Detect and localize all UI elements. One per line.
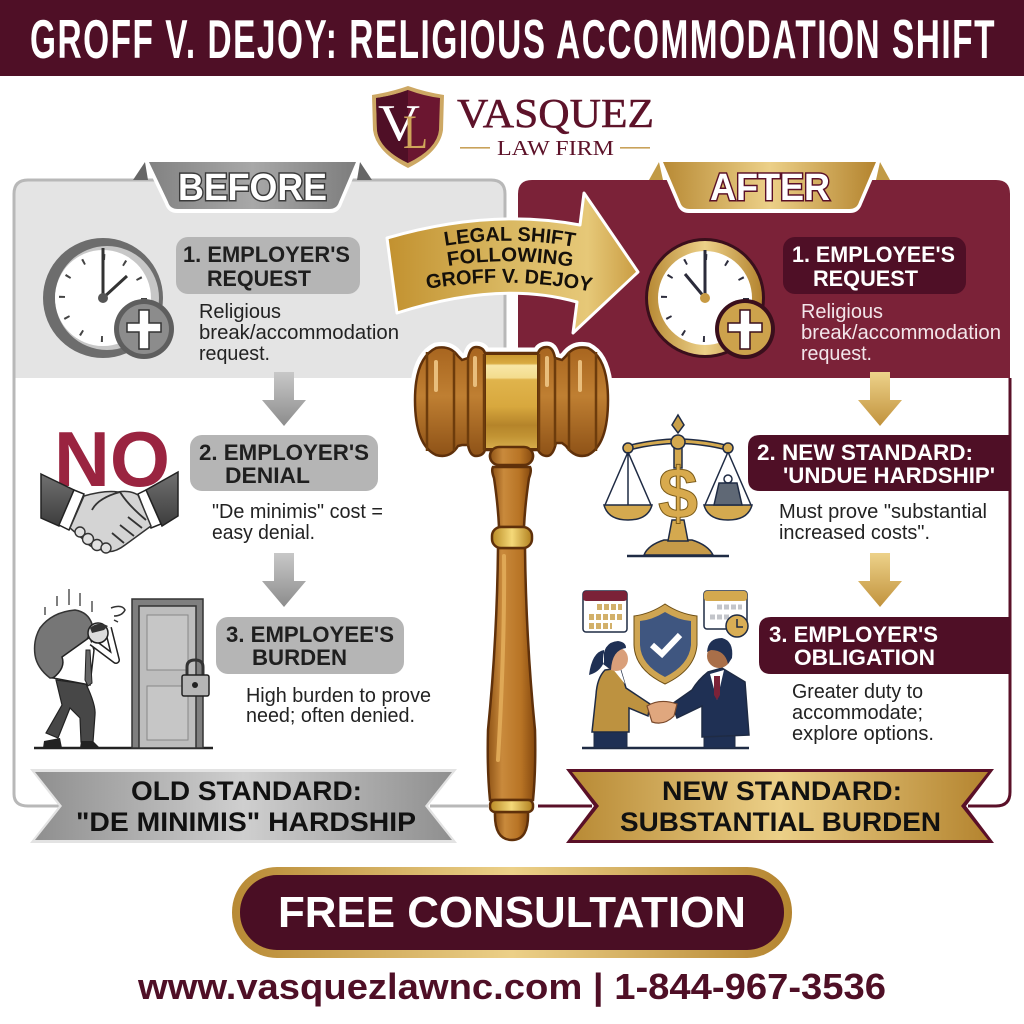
calendar right with clock — [704, 591, 748, 637]
step text: obligation — [792, 680, 934, 745]
step label: new standard undue hardship: 2. NEW STANDARD: — [757, 440, 973, 465]
law firm logo: VASQUEZ — [457, 90, 654, 136]
arrow: step 2 to 3 — [262, 553, 306, 607]
step text: obligation: explore options. — [792, 722, 934, 745]
step text: denial: "De minimis" cost = — [212, 500, 383, 523]
icon: shield monogram — [372, 86, 444, 168]
icon: scales with dollar: $ — [658, 454, 698, 534]
step label: employer's request — [176, 237, 360, 294]
step text: obligation: accommodate; — [792, 701, 923, 724]
button: free consultation — [232, 867, 792, 958]
panel top tint — [14, 180, 505, 378]
step text: request — [801, 300, 1001, 365]
man — [672, 638, 749, 748]
icon: scales with dollar — [604, 415, 752, 556]
clasped hands — [647, 701, 677, 723]
step text: request: request. — [801, 342, 872, 365]
icon: handshake — [41, 472, 178, 553]
icon: clock with cross — [43, 238, 174, 359]
step text: undue hardship — [779, 500, 987, 544]
padlock — [182, 660, 209, 696]
arrow: legal shift — [386, 192, 640, 335]
contact line: www.vasquezlawnc.com | 1-844-967-3536 — [137, 966, 886, 1008]
step label: employee's request: REQUEST — [813, 266, 919, 291]
step label: employer's obligation — [759, 617, 1010, 674]
tab: after: AFTER — [710, 167, 830, 209]
collar over head — [490, 447, 533, 465]
sack and motion lines — [35, 589, 125, 678]
gavel outline halo — [415, 347, 608, 456]
law firm logo — [372, 86, 654, 168]
step label: new standard undue hardship: 'UNDUE HARDSHIP' — [783, 463, 995, 488]
ribbon: old standard — [30, 769, 457, 843]
tab: before — [133, 162, 372, 213]
ribbon: old standard: OLD STANDARD: — [131, 776, 362, 806]
law firm logo: LAW FIRM — [497, 136, 614, 160]
tab: after — [649, 162, 890, 213]
woman — [589, 641, 650, 748]
step text: request — [199, 300, 399, 365]
arrow: step 1 to 2 — [858, 372, 902, 426]
panel outline — [14, 180, 505, 806]
step text: request: request. — [199, 342, 270, 365]
step label: employer's denial — [190, 435, 378, 491]
shield with check — [634, 604, 697, 684]
panel: after — [518, 162, 1010, 843]
tab: before: BEFORE — [178, 167, 327, 209]
panel top fill — [518, 180, 1010, 378]
step text: undue hardship: Must prove "substantial — [779, 500, 987, 523]
gavel head — [415, 347, 608, 456]
step label: employee's burden — [216, 617, 404, 674]
step text: burden: High burden to prove — [246, 684, 431, 707]
icon: clock with cross — [645, 238, 775, 359]
arrow: legal shift: FOLLOWING — [447, 247, 572, 266]
step label: employee's burden: 3. EMPLOYEE'S — [226, 622, 394, 647]
step label: new standard undue hardship — [748, 435, 1010, 491]
text: NO: NO — [54, 415, 170, 503]
step text: denial: easy denial. — [212, 521, 315, 544]
step text: burden: need; often denied. — [246, 704, 415, 727]
gavel handle — [488, 447, 535, 840]
step text: request: Religious — [199, 300, 281, 323]
man — [43, 623, 116, 748]
button: free consultation: FREE CONSULTATION — [278, 888, 746, 937]
step text: undue hardship: increased costs". — [779, 521, 930, 544]
arrow: step 1 to 2 — [262, 372, 306, 426]
step label: employer's denial: 2. EMPLOYER'S — [199, 440, 369, 465]
step text: denial — [212, 500, 383, 544]
arrow: step 2 to 3 — [858, 553, 902, 607]
icon: shield monogram: L — [403, 106, 428, 159]
step label: employer's obligation: OBLIGATION — [794, 645, 935, 670]
ribbon: new standard — [566, 769, 994, 843]
panel: before — [14, 162, 505, 843]
icon: man with burden at locked door — [34, 589, 213, 748]
step label: employer's request: REQUEST — [207, 266, 312, 291]
step text: request: Religious — [801, 300, 883, 323]
step label: employer's denial: DENIAL — [225, 463, 310, 488]
door — [132, 599, 203, 748]
ribbon: old standard: "DE MINIMIS" HARDSHIP — [76, 807, 416, 837]
step label: employee's request — [783, 237, 966, 294]
arrow: legal shift: LEGAL SHIFT — [444, 227, 576, 246]
step label: employer's obligation: 3. EMPLOYER'S — [769, 622, 938, 647]
step label: employee's request: 1. EMPLOYEE'S — [792, 242, 955, 267]
step text: burden — [246, 684, 431, 727]
step text: request: break/accommodation — [199, 321, 399, 344]
panel outline — [538, 378, 1010, 806]
step label: employer's request: 1. EMPLOYER'S — [183, 242, 350, 267]
calendar left — [583, 591, 627, 632]
gavel — [415, 347, 608, 840]
step text: request: break/accommodation — [801, 321, 1001, 344]
ribbon: new standard: SUBSTANTIAL BURDEN — [620, 807, 941, 837]
icon: employer and employee handshake with shield — [582, 591, 749, 748]
icon: shield monogram: V — [378, 95, 420, 152]
ribbon: new standard: NEW STANDARD: — [662, 776, 902, 806]
step label: employee's burden: BURDEN — [252, 645, 347, 670]
arrow: legal shift: GROFF V. DEJOY — [426, 268, 594, 291]
step text: obligation: Greater duty to — [792, 680, 923, 703]
